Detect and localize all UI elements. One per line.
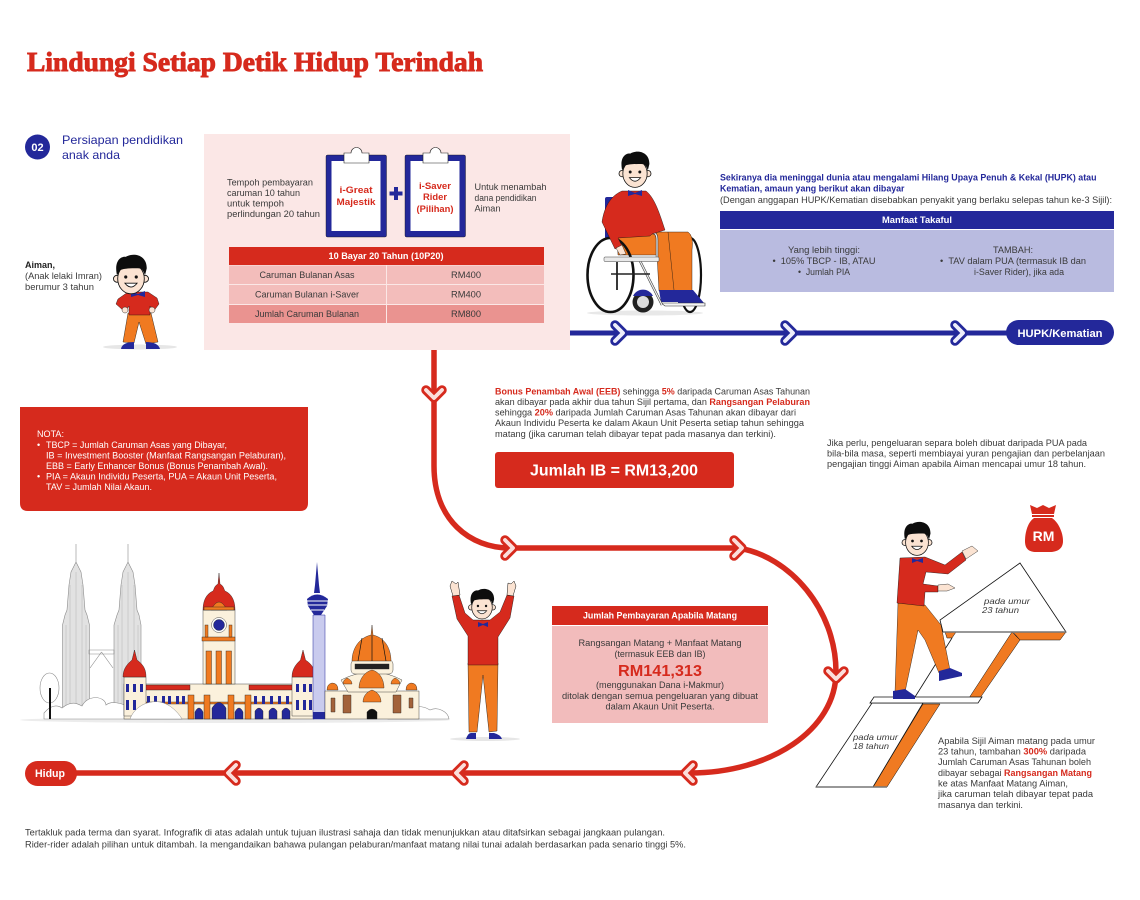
text: purpose — [474, 182, 546, 214]
Sultan Abdul Samad building — [123, 573, 315, 719]
panel: total maturity payment: (menggunakan Dana i-Makmur) — [596, 680, 724, 690]
panel: Manfaat Takaful table: Manfaat Takaful — [882, 215, 952, 225]
table: 10P20 contributions — [229, 247, 544, 323]
footer disclaimer: Rider-rider adalah pilihan untuk ditambah. Ia mengandaikan bahawa pulangan pelaburan/manfaat matang nilai tunai adalah berdasarkan pada senario tinggi 5%. — [25, 840, 686, 850]
panel: nota — [20, 407, 308, 511]
text: Aiman description: (Anak lelaki Imran) — [25, 271, 102, 281]
table: 10P20 contributions: Caruman Bulanan Asas — [260, 270, 355, 280]
illustration: young Aiman — [103, 255, 177, 350]
text: purpose: Aiman — [474, 204, 500, 214]
table: 10P20 contributions: RM400 — [451, 290, 481, 300]
text: payment term: untuk tempoh — [227, 198, 284, 208]
clipboard: i-Great Majestik — [326, 148, 386, 237]
panel: total maturity payment: ditolak dengan semua pengeluaran yang dibuat — [562, 691, 759, 701]
section heading: 02: 02 — [31, 142, 44, 154]
label: Hidup: Hidup — [35, 768, 65, 780]
footer disclaimer: Tertakluk pada terma dan syarat. Infografik di atas adalah untuk tujuan ilustrasi sahaja dan tidak menunjukkan atau ditafsirkan sebagai jangkaan pulangan. — [25, 828, 665, 838]
text: maturity incentive — [937, 736, 1095, 810]
panel: Manfaat Takaful table: • Jumlah PIA — [798, 267, 850, 277]
panel: total maturity payment: RM141,313 — [618, 663, 702, 680]
label: pada umur 23 tahun — [981, 596, 1031, 615]
clipboard: i-Saver Rider: Rider — [423, 192, 448, 202]
text: maturity incentive: masanya dan terkini. — [938, 800, 1023, 810]
panel: total maturity payment: Rangsangan Matang + Manfaat Matang — [578, 638, 742, 648]
text: purpose: dana pendidikan — [474, 193, 536, 203]
illustration: Aiman climbing steps — [893, 522, 978, 699]
panel: nota: PIA = Akaun Individu Peserta, PUA = Akaun Unit Peserta, — [46, 472, 277, 482]
panel: nota: • — [37, 440, 40, 450]
text: maturity incentive: dibayar sebagai Rangsangan Matang — [938, 768, 1092, 778]
text: maturity incentive: jika caruman telah dibayar tepat pada — [937, 789, 1093, 799]
clipboard: i-Saver Rider: (Pilihan) — [416, 204, 454, 214]
text: purpose: Untuk menambah — [474, 182, 546, 192]
label: pada umur 23 tahun: 23 tahun — [981, 605, 1019, 615]
label: pada umur 18 tahun: 18 tahun — [853, 741, 889, 751]
clipboard: i-Great Majestik: i-Great — [340, 185, 372, 195]
illustration: steps to age 23 — [816, 563, 1066, 787]
panel: total maturity payment — [552, 606, 768, 723]
bushes and tree — [40, 673, 449, 719]
National mosque style building — [325, 625, 419, 719]
Petronas towers — [62, 544, 141, 707]
clipboard: i-Saver Rider: i-Saver — [419, 181, 452, 191]
label: Hidup — [25, 761, 77, 786]
text: early enhancer bonus: akan dibayar pada akhir dua tahun Sijil pertama, dan Rangsangan Pelaburan — [495, 397, 810, 407]
panel: Manfaat Takaful table: • TAV dalam PUA (termasuk IB dan — [940, 256, 1086, 266]
text: payment term: Tempoh pembayaran — [227, 178, 313, 188]
text: early enhancer bonus: sehingga 20% daripada Jumlah Caruman Asas Tahunan akan dibayar dari — [495, 408, 796, 418]
text: payment term: perlindungan 20 tahun — [227, 209, 320, 219]
text: payment term: caruman 10 tahun — [227, 188, 300, 198]
text: maturity incentive: Jumlah Caruman Asas Tahunan boleh — [938, 757, 1091, 767]
panel: nota: TBCP = Jumlah Caruman Asas yang Dibayar, — [46, 440, 227, 450]
text: early enhancer bonus: Bonus Penambah Awal (EEB) sehingga 5% daripada Caruman Asas Tahunan — [495, 386, 810, 396]
text: HUPK intro — [720, 172, 1112, 205]
label: pada umur 23 tahun: pada umur — [983, 596, 1031, 606]
icon: plus — [390, 187, 402, 200]
KL Tower — [307, 562, 328, 719]
section heading: 02: Persiapan pendidikan — [62, 133, 183, 147]
text: early enhancer bonus: matang (jika caruman telah dibayar tepat pada masanya dan terkini). — [495, 429, 776, 439]
panel: Manfaat Takaful table: • 105% TBCP - IB, ATAU — [772, 256, 876, 266]
text: Aiman description: Aiman, — [25, 260, 55, 270]
panel: total maturity payment: Jumlah Pembayaran Apabila Matang — [583, 610, 737, 620]
table: 10P20 contributions: Jumlah Caruman Bulanan — [255, 309, 359, 319]
panel: contribution plan — [204, 134, 570, 350]
text: early enhancer bonus — [495, 386, 810, 439]
text: partial withdrawal: bila-bila masa, seperti membiayai yuran pengajian dan perbelanjaan — [827, 448, 1105, 458]
illustration: man in wheelchair — [587, 152, 705, 316]
icon: money bag: RM — [1033, 528, 1054, 544]
table: 10P20 contributions: RM400 — [451, 270, 481, 280]
footer disclaimer — [25, 828, 686, 850]
label: pada umur 18 tahun — [852, 732, 899, 751]
illustration: Aiman with raised arms — [450, 581, 520, 741]
table: 10P20 contributions: Caruman Bulanan i-Saver — [255, 290, 359, 300]
panel: total maturity payment: (termasuk EEB dan IB) — [614, 649, 706, 659]
title: Lindungi Setiap Detik Hidup Terindah — [27, 47, 483, 77]
panel: Manfaat Takaful table: TAMBAH: — [993, 245, 1033, 255]
text: Aiman description — [25, 260, 102, 292]
panel: Manfaat Takaful table: Yang lebih tinggi: — [788, 245, 860, 255]
table: 10P20 contributions: 10 Bayar 20 Tahun (10P20) — [328, 251, 444, 261]
arrow: blue path to HUPK — [570, 325, 1010, 341]
text: maturity incentive: Apabila Sijil Aiman matang pada umur — [938, 736, 1095, 746]
panel: nota: NOTA: — [37, 429, 64, 439]
panel: Manfaat Takaful table — [720, 211, 1114, 292]
text: HUPK intro: Sekiranya dia meninggal dunia atau mengalami Hilang Upaya Penuh & Kekal (HUPK) atau — [720, 172, 1096, 182]
table: 10P20 contributions: RM800 — [451, 309, 481, 319]
label: pada umur 18 tahun: pada umur — [852, 732, 899, 742]
illustration: Kuala Lumpur skyline — [20, 544, 450, 723]
panel: total maturity payment: dalam Akaun Unit Peserta. — [606, 702, 714, 712]
clipboard: i-Great Majestik: Majestik — [336, 197, 377, 207]
label: HUPK/Kematian: HUPK/Kematian — [1018, 328, 1103, 340]
text: HUPK intro: Kematian, amaun yang berikut akan dibayar — [720, 184, 905, 194]
label: HUPK/Kematian — [1006, 320, 1114, 345]
callout: Jumlah IB — [495, 452, 734, 488]
panel: nota: IB = Investment Booster (Manfaat Rangsangan Pelaburan), — [46, 450, 286, 460]
text: partial withdrawal — [827, 438, 1105, 469]
text: early enhancer bonus: Akaun Individu Peserta ke dalam Akaun Unit Peserta setiap tahun sehingga — [495, 418, 804, 428]
text: partial withdrawal: Jika perlu, pengeluaran separa boleh dibuat daripada PUA pada — [827, 438, 1087, 448]
text: Aiman description: berumur 3 tahun — [25, 282, 94, 292]
panel: nota: EBB = Early Enhancer Bonus (Bonus Penambah Awal). — [46, 461, 268, 471]
callout: Jumlah IB: Jumlah IB = RM13,200 — [530, 462, 698, 480]
text: partial withdrawal: pengajian tinggi Aiman apabila Aiman mencapai umur 18 tahun. — [827, 459, 1086, 469]
panel: nota: • — [37, 472, 40, 482]
text: HUPK intro: (Dengan anggapan HUPK/Kematian disebabkan penyakit yang berlaku selepas tahun ke-3 Sijil): — [720, 195, 1112, 205]
section heading: 02 — [25, 133, 183, 162]
arrow: red life path — [76, 350, 844, 781]
panel: Manfaat Takaful table: i-Saver Rider), jika ada — [974, 267, 1064, 277]
panel: nota: TAV = Jumlah Nilai Akaun. — [46, 482, 152, 492]
section heading: 02: anak anda — [62, 148, 120, 162]
icon: money bag — [1025, 505, 1063, 552]
text: payment term — [227, 178, 320, 219]
text: maturity incentive: ke atas Manfaat Matang Aiman, — [938, 778, 1068, 788]
text: maturity incentive: 23 tahun, tambahan 300% daripada — [938, 746, 1086, 756]
clipboard: i-Saver Rider — [405, 148, 466, 237]
